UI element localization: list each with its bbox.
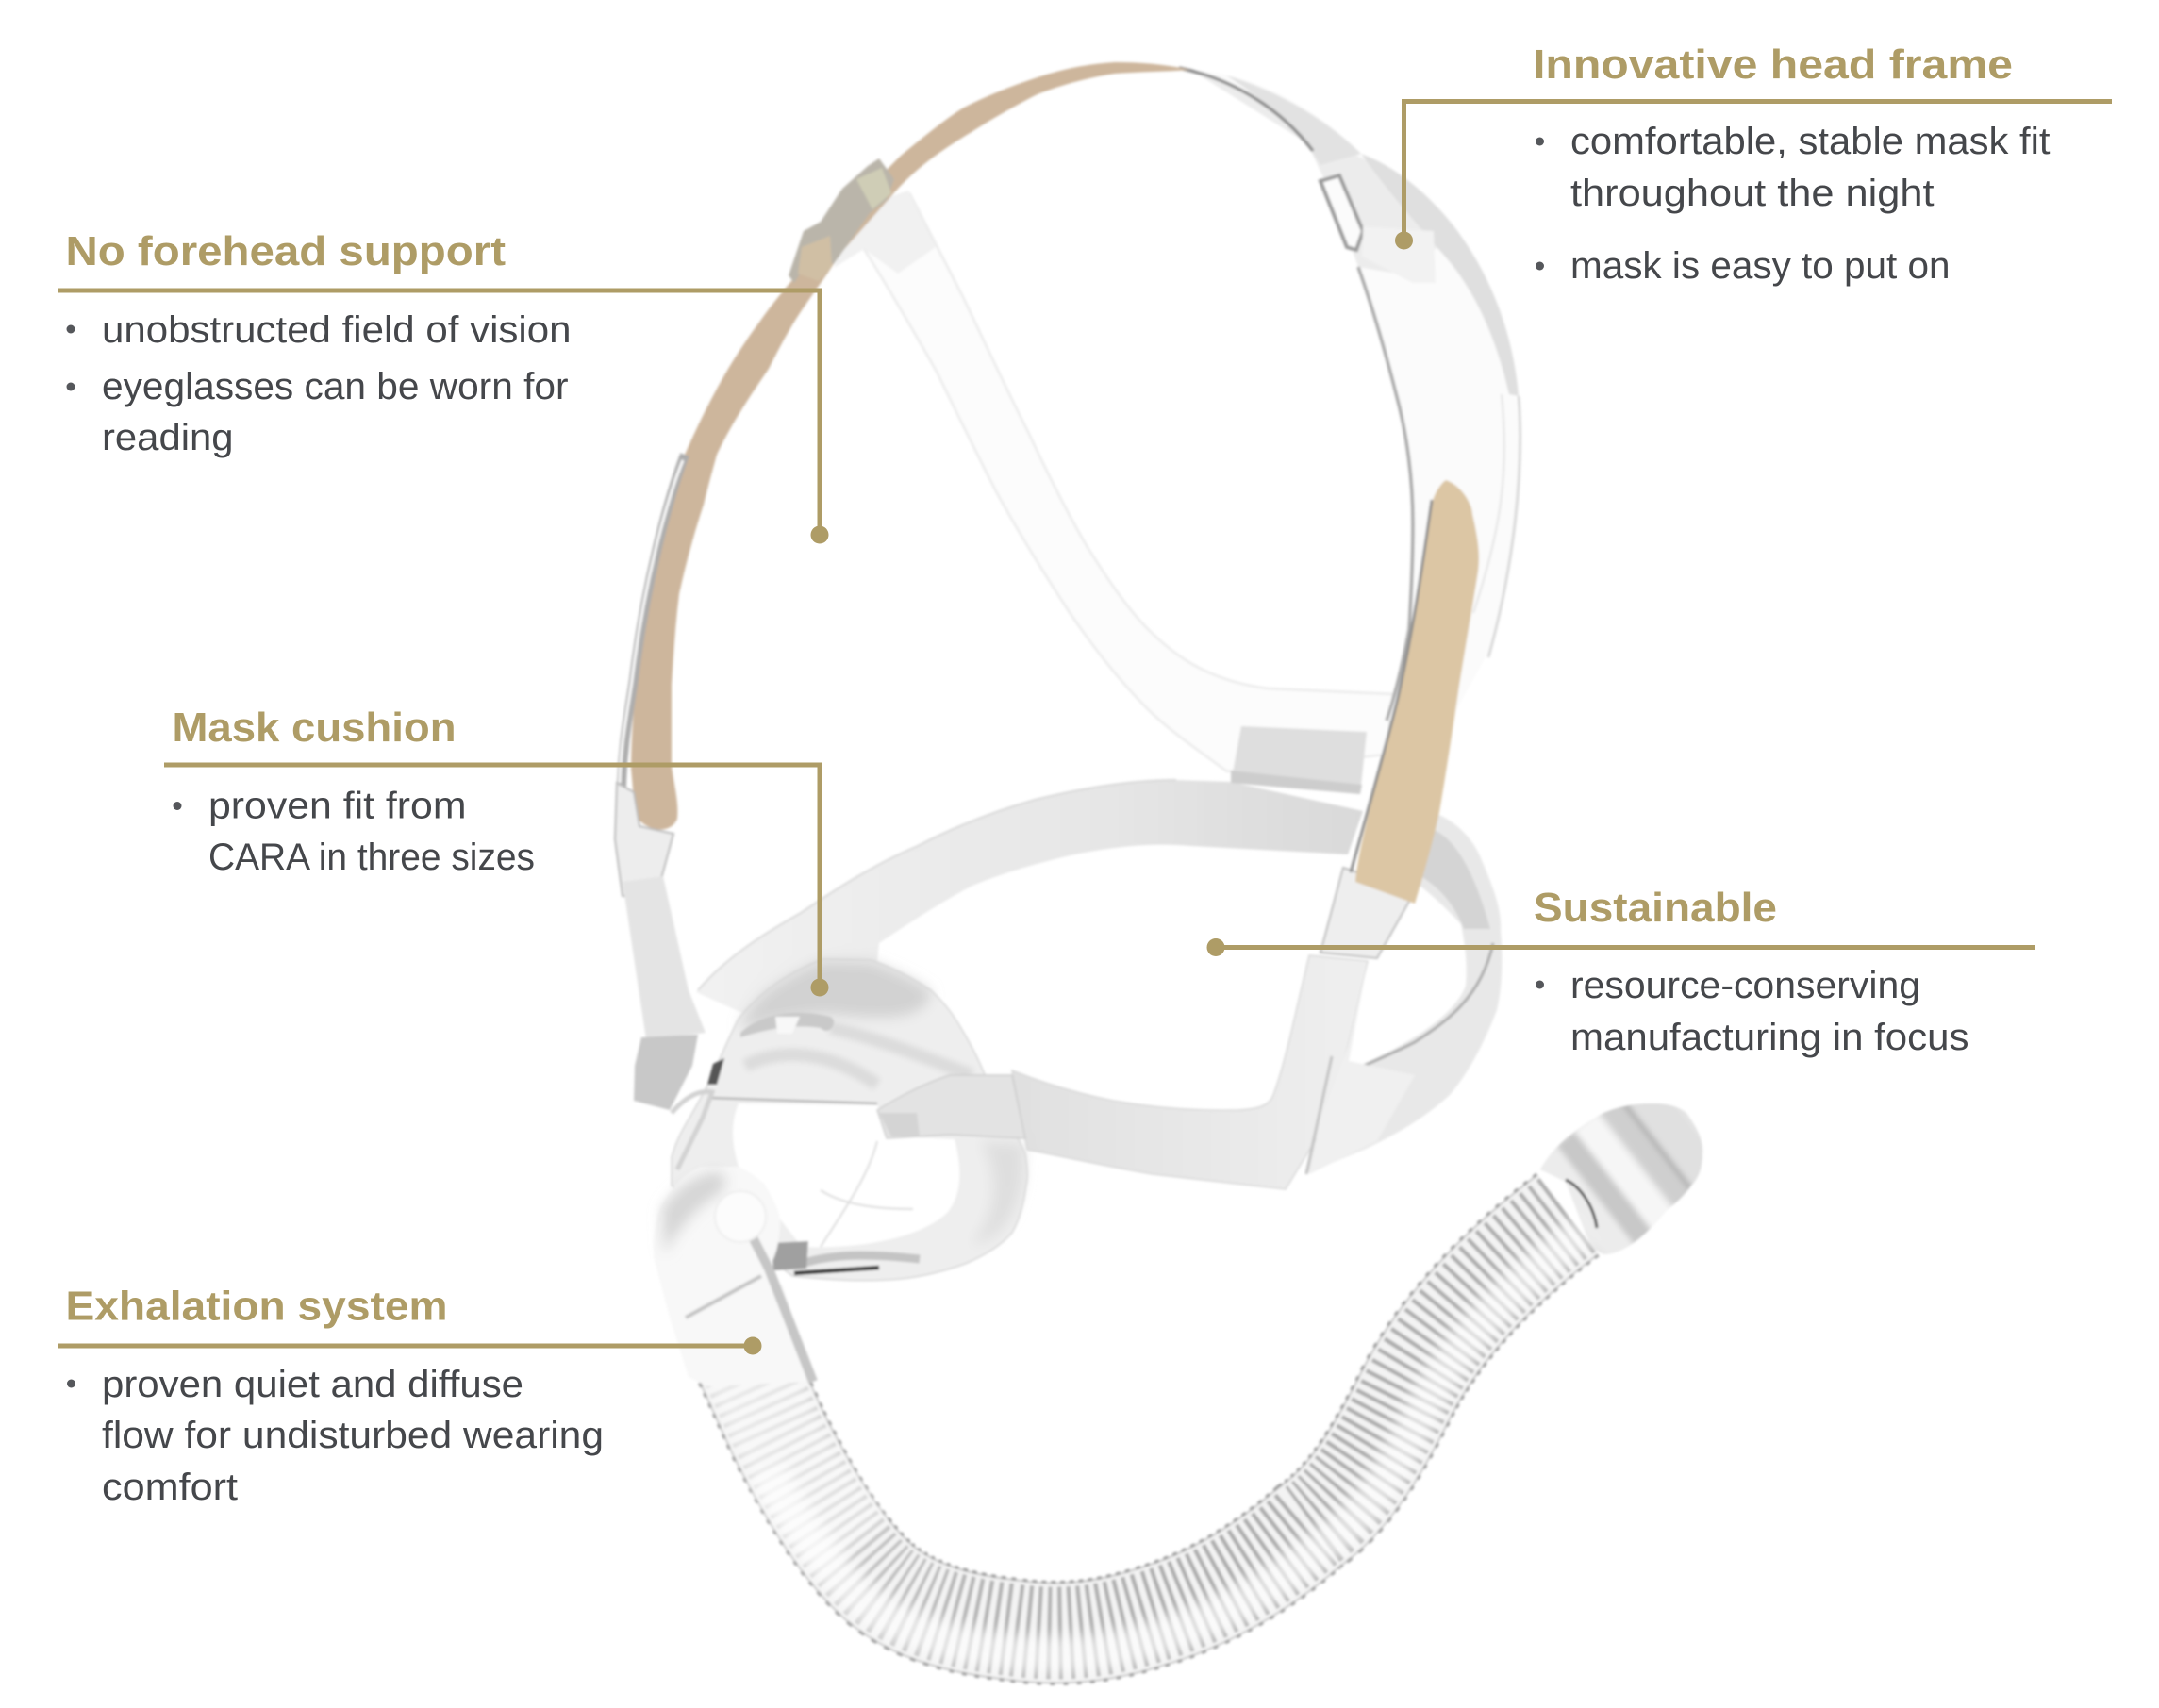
bullet list: proven quiet and diffuse <box>102 1364 523 1405</box>
clear arm from clip to shell <box>672 1091 712 1169</box>
L bracket strap <box>1012 955 1368 1189</box>
bullet list: comfortable, stable mask fit <box>1570 121 2051 162</box>
bullet list <box>174 785 535 878</box>
tube end rim <box>1566 1180 1597 1228</box>
cushion shell <box>672 959 1027 1281</box>
cushion side strap <box>877 1075 1025 1138</box>
leader line with dot <box>58 1337 762 1354</box>
callout: innovative head frame <box>1395 41 2112 287</box>
leader line with dot <box>58 290 828 543</box>
clear upright strap above L bracket <box>1320 868 1415 958</box>
soft streaks on upper shell <box>745 1028 972 1085</box>
elbow <box>654 1167 813 1386</box>
callout: sustainable <box>1207 885 2035 1058</box>
bullet list: mask is easy to put on <box>1570 245 1951 287</box>
bullet list: CARA in three sizes <box>208 837 535 878</box>
callout: no forehead support <box>58 228 828 543</box>
gray tab on band <box>1231 726 1367 794</box>
bullet list <box>67 1364 604 1508</box>
bullet list <box>1536 965 1969 1058</box>
clear back strap from forehead clip to lower band <box>864 194 1393 771</box>
leader line with dot <box>164 765 828 996</box>
silver blade beside left band <box>620 455 685 788</box>
right tan pad <box>1355 480 1479 904</box>
callout: mask cushion <box>164 705 828 996</box>
icon: buckle slot <box>1320 175 1363 250</box>
heading: Mask cushion <box>172 705 457 751</box>
top and left tan head band <box>631 62 1190 830</box>
bullet list: reading <box>102 417 234 458</box>
leader line with dot <box>1395 102 2112 249</box>
rear loop of band <box>1304 809 1502 1174</box>
tube end connector <box>1541 1103 1703 1254</box>
bullet list: resource-conserving <box>1570 965 1920 1006</box>
heading: Exhalation system <box>66 1283 447 1330</box>
cushion dome shading <box>739 961 931 1028</box>
heading: No forehead support <box>66 228 506 274</box>
clear junction below forehead clip <box>834 191 936 274</box>
corrugated tube <box>738 1215 1583 1655</box>
bullet list: manufacturing in focus <box>1570 1017 1969 1058</box>
gray side clip <box>634 1035 698 1110</box>
bullet list: flow for undisturbed wearing <box>102 1415 604 1456</box>
heading: Innovative head frame <box>1533 41 2013 88</box>
left side strap <box>623 876 706 1039</box>
callout: exhalation system <box>58 1283 762 1508</box>
gray front head band <box>696 780 1363 1019</box>
bullet list: unobstructed field of vision <box>102 309 572 351</box>
clear connector at lower end of band <box>615 783 673 896</box>
dark seam under mask <box>802 1255 920 1264</box>
bullet list: eyeglasses can be worn for <box>102 366 568 407</box>
leader line with dot <box>1207 938 2035 956</box>
nasal opening ridge <box>740 1013 834 1037</box>
clear right strap <box>1179 68 1520 721</box>
heading: Sustainable <box>1534 885 1777 931</box>
bullet list <box>1536 121 2051 287</box>
bullet list <box>66 309 572 458</box>
transparent white interior of mask <box>733 1103 959 1247</box>
bullet list: throughout the night <box>1570 173 1934 214</box>
bullet list: comfort <box>102 1467 238 1508</box>
bullet list: proven fit from <box>208 785 466 826</box>
gray forehead clip <box>789 158 894 283</box>
illustration: nasal mask with head frame and tube <box>615 62 1732 1655</box>
